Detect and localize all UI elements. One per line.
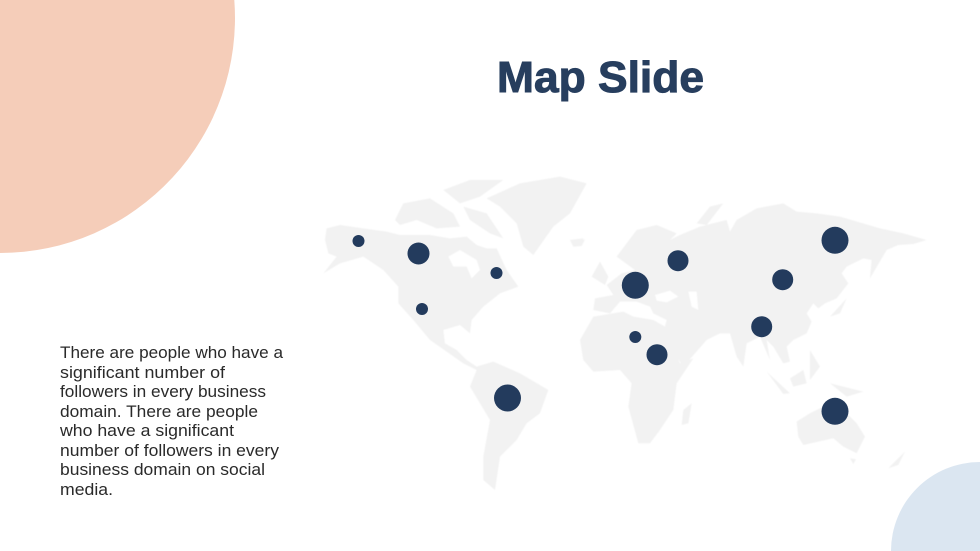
body text block: domain. There are people: [60, 402, 258, 421]
marker: North Africa: [629, 331, 641, 343]
decorative blue circle, bottom right: [891, 462, 980, 551]
marker: Eastern Canada: [490, 267, 502, 279]
map location markers: [352, 227, 848, 425]
marker: Western Canada: [408, 242, 430, 264]
marker: Australia: [822, 398, 848, 425]
marker: Western USA: [416, 303, 428, 315]
map: Americas and Greenland: [323, 177, 587, 490]
marker: Brazil: [494, 384, 521, 412]
title: Map Slide: [497, 53, 704, 102]
body text block: followers in every business: [60, 382, 266, 401]
body text block: There are people who have a: [60, 343, 284, 362]
marker: Alaska: [352, 235, 364, 247]
marker: South Asia: [751, 316, 772, 337]
body text block: who have a significant: [59, 421, 234, 440]
marker: Eastern Siberia: [822, 227, 848, 254]
marker: Eastern Europe: [668, 250, 688, 271]
decorative peach circle, top left: [0, 0, 235, 253]
marker: Central Asia: [772, 269, 793, 290]
body text block: number of followers in every: [60, 441, 280, 460]
marker: Western Europe: [622, 272, 649, 299]
body text block: media.: [60, 480, 113, 499]
map: Europe, Asia, Africa and Oceania: [572, 203, 927, 468]
body text block: business domain on social: [60, 460, 265, 479]
world map: [323, 177, 927, 490]
marker: East Africa: [646, 344, 668, 365]
body text block: [59, 343, 284, 499]
body text block: significant number of: [60, 363, 225, 382]
